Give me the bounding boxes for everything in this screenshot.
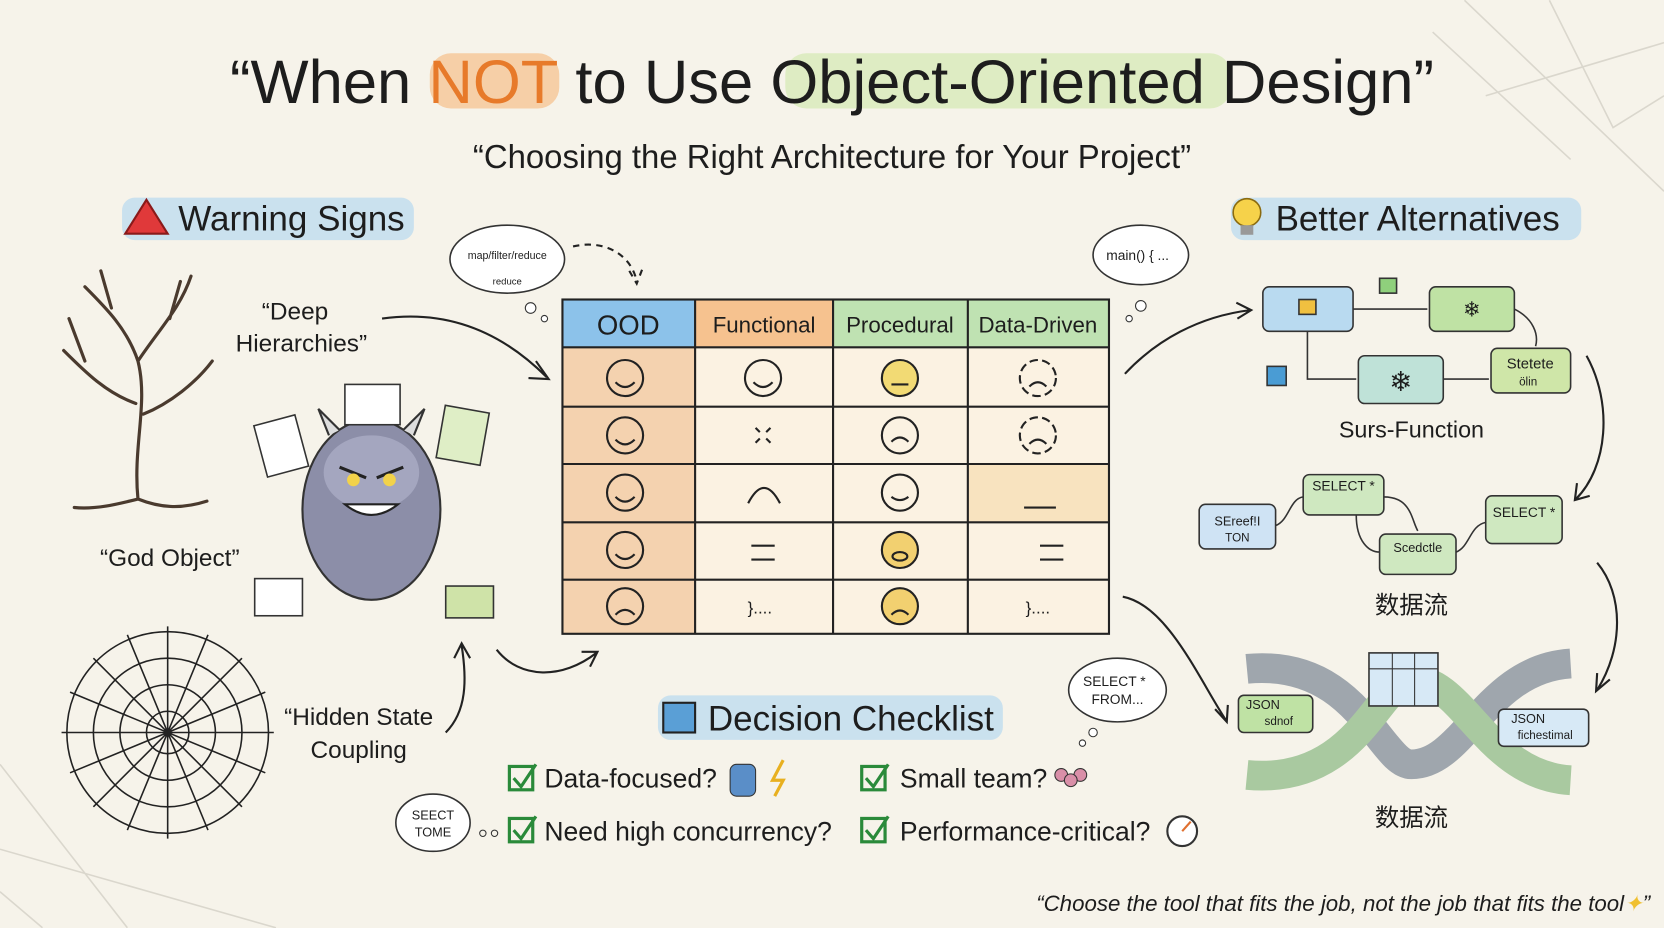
comparison table: OOD <box>597 310 660 341</box>
footer quote: “Choose the tool that fits the job, not the job that fits the tool✦” <box>1036 891 1652 916</box>
thought bubble: select tome: TOME <box>415 824 451 839</box>
heading: better alternatives: Better Alternatives <box>1276 200 1560 239</box>
comparison table: Data-Driven <box>978 312 1097 337</box>
label: deep hierarchies: “Deep <box>262 299 328 326</box>
label: surs-function: Surs-Function <box>1339 416 1484 442</box>
label: data flow 2: 数据流 <box>1375 805 1448 832</box>
diagram: data flow select: SEreef!I <box>1214 514 1260 529</box>
comparison table: }.... <box>1026 599 1050 618</box>
diagram: data flow select: SELECT * <box>1312 479 1375 494</box>
title: “When NOT to Use Object-Oriented Design” <box>230 48 1434 117</box>
subtitle: “Choosing the Right Architecture for Your Project” <box>473 138 1191 175</box>
checklist items: Need high concurrency? <box>544 817 832 847</box>
diagram: pipes: sdnof <box>1265 715 1294 728</box>
diagram: pipes: JSON <box>1511 711 1545 726</box>
comparison table: Procedural <box>846 312 954 337</box>
thought bubble: main <box>1093 225 1189 322</box>
diagram: pipes <box>1238 653 1589 780</box>
label: data flow 1: 数据流 <box>1375 593 1448 620</box>
checklist items: Data-focused? <box>544 764 717 794</box>
diagram: pipes: fichestimal <box>1518 729 1573 742</box>
comparison table: }.... <box>748 599 772 618</box>
icon: dead tree <box>64 271 212 508</box>
icon: god object monster <box>254 384 493 618</box>
diagram: functions: ölin <box>1519 375 1537 388</box>
thought bubble: main: main() { ... <box>1106 248 1169 263</box>
heading: decision checklist: Decision Checklist <box>708 699 994 738</box>
diagram: functions: ❄ <box>1463 298 1481 321</box>
arrows <box>382 245 1617 732</box>
checklist items <box>509 760 1197 847</box>
text: Hierarchies” <box>236 331 367 358</box>
heading: warning signs: Warning Signs <box>178 200 405 239</box>
label: hidden state coupling: “Hidden State <box>284 704 433 731</box>
diagram: functions <box>1263 278 1571 404</box>
diagram: data flow select: Scedctle <box>1393 540 1442 555</box>
thought bubble: select tome <box>396 794 498 851</box>
thought bubble: map/filter/reduce: reduce <box>493 277 522 288</box>
text: Coupling <box>311 737 407 764</box>
thought bubble: select tome: SEECT <box>412 808 454 823</box>
diagram: data flow select: TON <box>1225 531 1250 544</box>
faces <box>607 360 1063 624</box>
thought bubble: select from <box>1069 658 1166 746</box>
checklist items: Small team? <box>900 764 1047 794</box>
diagram: functions: Stetete <box>1507 356 1554 372</box>
thought bubble: map/filter/reduce <box>450 225 565 322</box>
diagram: data flow select <box>1199 475 1562 574</box>
diagram: data flow select: SELECT * <box>1493 505 1556 520</box>
diagram: pipes: JSON <box>1246 697 1280 712</box>
thought bubble: select from: FROM... <box>1091 692 1144 707</box>
diagram: functions: ❄ <box>1389 366 1412 397</box>
icon: spider web <box>62 626 274 839</box>
comparison table: Functional <box>713 312 815 337</box>
thought bubble: select from: SELECT * <box>1083 674 1146 689</box>
label: god object: “God Object” <box>100 545 240 572</box>
thought bubble: map/filter/reduce: map/filter/reduce <box>468 250 547 262</box>
comparison table <box>562 300 1109 634</box>
checklist items: Performance-critical? <box>900 817 1150 847</box>
